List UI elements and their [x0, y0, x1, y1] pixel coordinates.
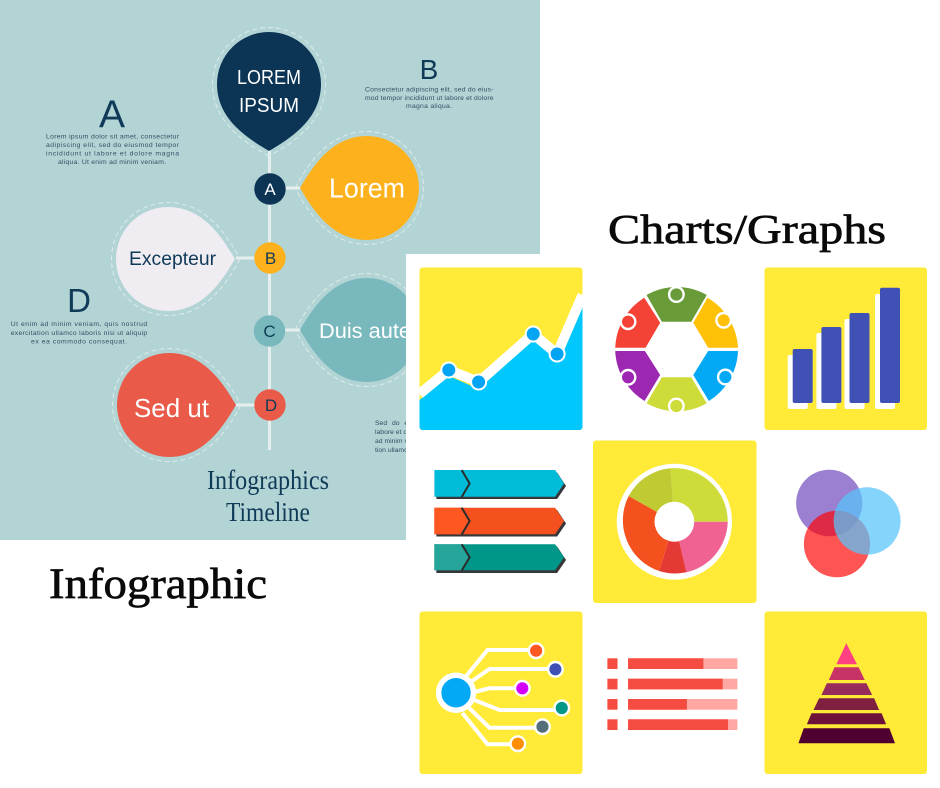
pin label: LOREM — [237, 66, 301, 89]
white panel behind chart grid — [406, 254, 940, 788]
infographic subtitle — [207, 465, 329, 527]
text block: D: ex ea commodo consequat. — [31, 338, 127, 346]
text block: B: magna aliqua. — [406, 103, 452, 110]
chart: hexagon cycle — [615, 287, 738, 413]
chart: bar chart — [764, 268, 927, 430]
teardrop: Lorem — [295, 132, 424, 244]
arrow bar: cyan — [434, 470, 566, 499]
text block: C (partly hidden): labore et dolore — [375, 429, 422, 436]
teardrop: Excepteur — [112, 202, 240, 316]
text block: D: exercitation ullamco laboris nisi ut aliquip — [11, 330, 147, 337]
text block: D: D — [67, 282, 91, 319]
teardrop: Sed ut — [112, 348, 241, 462]
infographic subtitle: Infographics — [207, 465, 329, 495]
teardrop: Duis aute — [295, 274, 424, 386]
text block: B: mod tempor incididunt ut labore et dolore — [365, 95, 494, 102]
timeline spine — [236, 150, 300, 450]
text block: A: A — [99, 94, 125, 136]
text block: C (partly hidden): Sed do eiusmod — [375, 420, 430, 427]
text block: A — [46, 94, 180, 166]
text block: B: B — [420, 54, 438, 85]
chart: pyramid — [764, 612, 927, 774]
text block: A: incididunt ut labore et dolore magna — [46, 150, 179, 158]
chart: node tree — [420, 612, 582, 774]
text block: D: Ut enim ad minim veniam, quis nostrud — [11, 321, 147, 328]
timeline nodes — [254, 173, 286, 421]
chart: arrow bars — [434, 470, 566, 573]
arrow bar: teal — [434, 544, 566, 573]
chart: line area — [420, 268, 582, 430]
teardrop: Lorem: Lorem — [329, 172, 405, 204]
timeline nodes: B — [265, 249, 276, 268]
pin label: IPSUM — [239, 94, 299, 117]
text block: A: Lorem ipsum dolor sit amet, consectetur — [46, 134, 180, 140]
panel: infographic timeline — [0, 0, 540, 540]
timeline nodes: A — [264, 180, 276, 199]
arrow bar: orange — [434, 508, 566, 536]
text block: B: Consectetur adipiscing elit, sed do eius- — [365, 86, 494, 94]
chart: venn diagram — [796, 470, 901, 577]
text block: C (partly hidden) — [375, 420, 430, 454]
teardrop: Duis aute: Duis aute — [319, 320, 411, 343]
timeline nodes: D — [265, 396, 277, 415]
timeline nodes: C — [263, 322, 276, 341]
chart: donut — [593, 440, 756, 603]
text block: A: adipiscing elit, sed do eiusmod tempor — [46, 142, 180, 149]
teardrop: Excepteur: Excepteur — [129, 249, 217, 270]
infographic subtitle: Timeline — [226, 497, 310, 527]
chart: horizontal bars — [607, 658, 737, 730]
pin: lorem ipsum — [212, 28, 326, 156]
heading: Infographic: Infographic — [49, 561, 267, 608]
pin label — [237, 66, 301, 117]
text block: D — [11, 282, 147, 346]
text block: C (partly hidden): tion ullamco — [375, 447, 411, 454]
heading: Charts/Graphs: Charts/Graphs — [608, 206, 886, 252]
text block: A: aliqua. Ut enim ad minim veniam. — [58, 159, 166, 166]
text block: B — [365, 54, 494, 110]
teardrop: Sed ut: Sed ut — [134, 393, 210, 423]
text block: C (partly hidden): ad minim veniam — [375, 438, 427, 445]
